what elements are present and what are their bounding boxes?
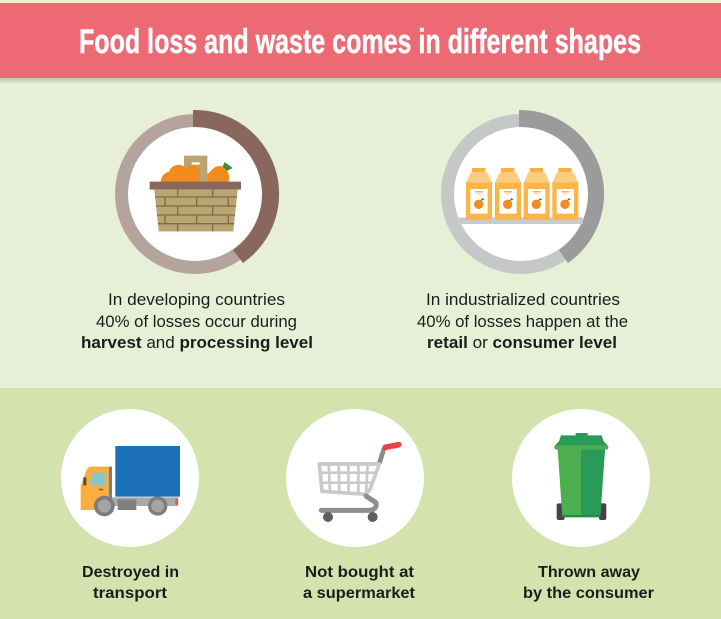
icon: basket of oranges: [150, 156, 241, 231]
text block: industrialized countries: [417, 291, 628, 352]
caption: consumer: Thrown away: [538, 564, 640, 581]
text block: industrialized countries: In industrialized countries: [426, 291, 620, 309]
title banner: [0, 3, 721, 78]
caption: transport: transport: [93, 585, 168, 602]
ring: developing countries basket: [122, 110, 279, 268]
icon: truck: [61, 409, 199, 547]
text block: developing countries: 40% of losses occur during: [96, 313, 297, 331]
caption: consumer: by the consumer: [523, 585, 654, 602]
caption: transport: Destroyed in: [82, 564, 179, 581]
text block: developing countries: In developing countries: [108, 291, 285, 309]
icon: shopping cart: [286, 409, 424, 547]
caption: supermarket: a supermarket: [303, 585, 416, 602]
text block: developing countries: [81, 291, 313, 352]
caption: supermarket: Not bought at: [305, 564, 415, 581]
icon: green bin: [512, 409, 650, 547]
caption: supermarket: [303, 564, 416, 602]
ring: industrialized countries juice cartons: [448, 110, 604, 268]
text block: industrialized countries: retail or consumer level: [427, 334, 617, 352]
caption: transport: [82, 564, 179, 602]
text block: developing countries: harvest and processing level: [81, 334, 313, 352]
text block: industrialized countries: 40% of losses happen at the: [417, 313, 628, 331]
icon: juice cartons on shelf: [457, 168, 583, 224]
caption: consumer: [523, 564, 654, 602]
panel: bottom band: [0, 388, 721, 619]
